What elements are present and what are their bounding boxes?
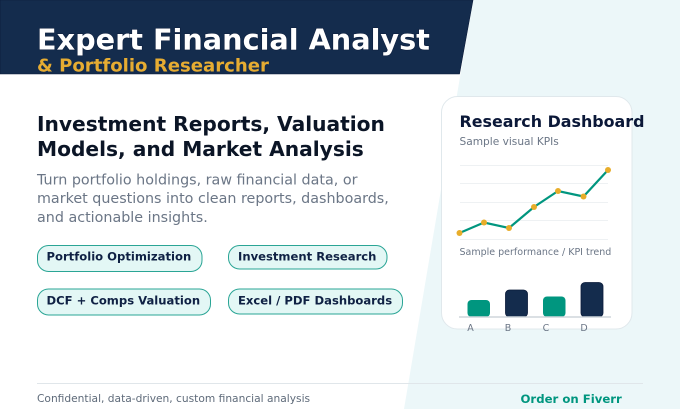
chart caption: Sample performance / KPI trend: [460, 247, 611, 258]
description text: Turn portfolio holdings, raw financial data, or: [36, 172, 358, 188]
pill: Excel / PDF Dashboards: Excel / PDF Dashboards: [238, 293, 392, 307]
pill: Excel / PDF Dashboards: [228, 289, 402, 314]
panel: research dashboard card: [442, 96, 644, 334]
pill: Investment Research: Investment Research: [238, 250, 376, 264]
card title: Research Dashboard: [460, 112, 644, 131]
pill: Portfolio Optimization: Portfolio Optimization: [46, 250, 191, 264]
header banner: [0, 0, 473, 74]
bar chart: A: [467, 323, 474, 334]
main heading: Investment Reports, Valuation: [37, 112, 385, 136]
footer call to action: Order on Fiverr: [520, 392, 622, 406]
title: Expert Financial Analyst: [37, 23, 430, 57]
bar chart: [459, 282, 611, 334]
pill: Investment Research: [228, 246, 387, 269]
background: pale diagonal panel: [404, 0, 680, 409]
card subtitle: Sample visual KPIs: [460, 136, 559, 148]
description text: market questions into clean reports, dashboards,: [37, 191, 389, 207]
description text: and actionable insights.: [37, 210, 208, 226]
pill: DCF + Comps Valuation: [38, 289, 210, 315]
main heading: Models, and Market Analysis: [37, 137, 364, 161]
line chart: [456, 166, 611, 240]
bar chart: B: [505, 323, 511, 334]
subtitle: & Portfolio Researcher: [37, 56, 269, 77]
bar chart: C: [543, 323, 550, 334]
pill: DCF + Comps Valuation: DCF + Comps Valuation: [46, 293, 200, 307]
pill: Portfolio Optimization: [38, 246, 202, 272]
footer note: Confidential, data-driven, custom financial analysis: [37, 392, 311, 405]
bar chart: D: [580, 323, 588, 334]
